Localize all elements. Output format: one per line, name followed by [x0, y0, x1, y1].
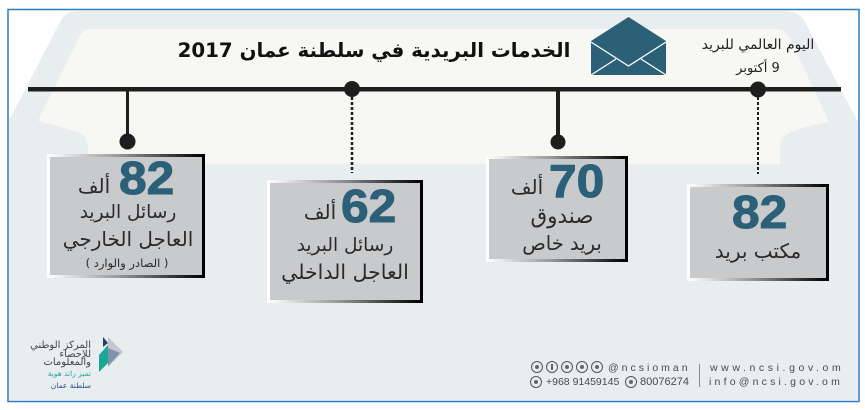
label: العاجل الخارجي [63, 227, 193, 251]
number 70: 70 [549, 155, 604, 207]
card: post offices [687, 184, 829, 281]
social icons [530, 361, 637, 388]
icon: logo mark [99, 337, 123, 372]
label: رسائل البريد [80, 202, 176, 223]
unit: ألف [304, 200, 336, 224]
organisation name [30, 340, 91, 368]
title: الخدمات البريدية في سلطنة عمان 2017 [178, 39, 570, 62]
organisation name: للإحصاء [59, 348, 91, 360]
unit: ألف [511, 175, 543, 199]
date caption [702, 37, 814, 76]
timeline [28, 81, 841, 174]
label [522, 204, 602, 255]
label [281, 235, 409, 284]
icon: envelope [591, 17, 666, 75]
note: ( الصادر والوارد ) [86, 256, 168, 270]
phone number: 80076274 [640, 376, 689, 388]
date caption: 9 أكتوبر [736, 61, 780, 76]
number 82: 82 [732, 186, 787, 238]
organisation name: المركز الوطني [30, 340, 91, 351]
card: domestic express mail [267, 180, 423, 303]
unit: ألف [78, 174, 110, 198]
country: سلطنة عمان [51, 381, 91, 390]
label: رسائل البريد [297, 235, 393, 256]
number 62: 62 [341, 180, 396, 232]
footer contact [530, 361, 844, 388]
website: www.ncsi.gov.om [710, 362, 844, 374]
label: صندوق [530, 204, 594, 229]
teal slogan: تميز رائد هوية [48, 369, 91, 378]
label: بريد خاص [522, 232, 602, 255]
card: external express mail [47, 154, 205, 278]
logo text [30, 340, 91, 390]
email: info@ncsi.gov.om [709, 376, 843, 388]
handle: @ncsioman [608, 362, 691, 374]
whatsapp number: +968 91459145 [546, 376, 619, 388]
label: مكتب بريد [715, 239, 801, 263]
footer divider [699, 364, 700, 387]
label: العاجل الداخلي [281, 260, 409, 284]
label [63, 202, 193, 251]
number 82: 82 [119, 152, 174, 204]
card: private boxes [486, 156, 628, 262]
organisation name: والمعلومات [43, 357, 91, 368]
date caption: اليوم العالمي للبريد [702, 37, 814, 53]
